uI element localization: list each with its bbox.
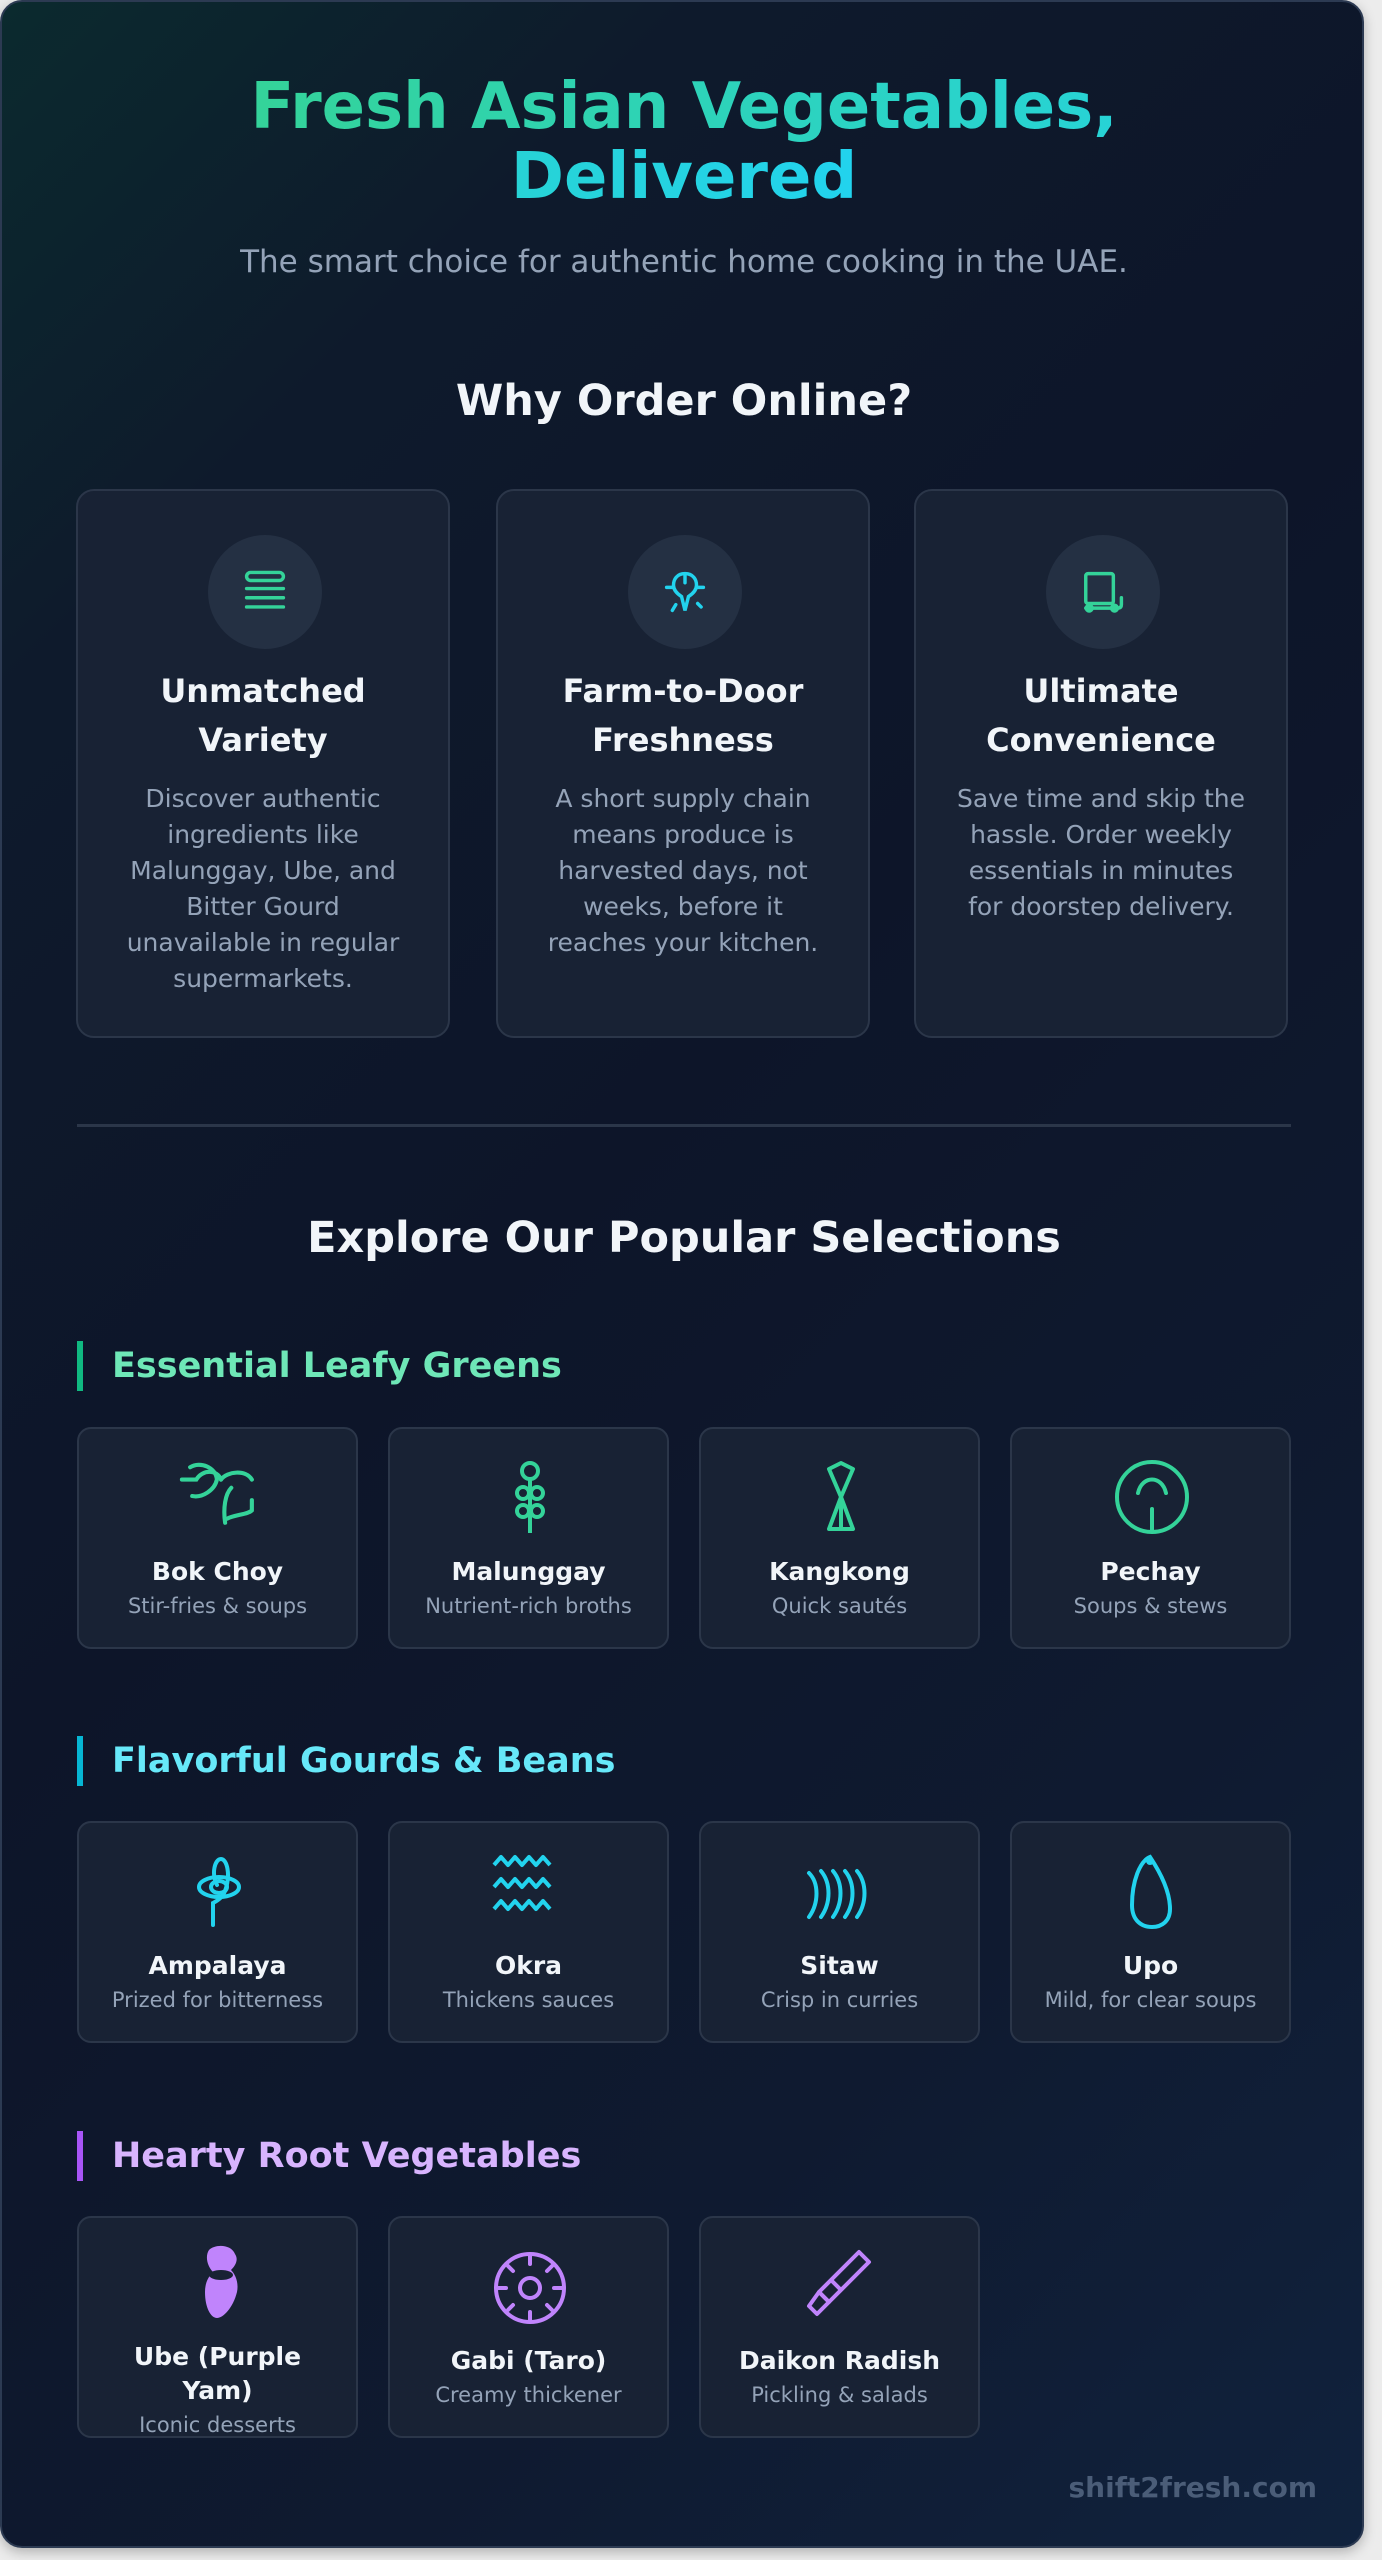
card: kangkong (699, 1427, 980, 1649)
panel: unmatched variety: Bitter Gourd (186, 892, 340, 921)
card: malunggay (388, 1427, 669, 1649)
card: upo: Mild, for clear soups (1045, 1988, 1256, 2012)
main card: Essential Leafy Greens (112, 1346, 562, 1386)
panel: farm-to-door: means produce is (572, 820, 794, 849)
panel: unmatched variety: Variety (198, 721, 328, 759)
card: malunggay: Malunggay (451, 1557, 606, 1586)
card: daikon: Pickling & salads (751, 2383, 928, 2407)
card: gabi (388, 2216, 669, 2438)
card: sitaw: Crisp in curries (761, 1988, 918, 2012)
title: Fresh Asian Vegetables, (250, 70, 1118, 144)
panel: convenience: hassle. Order weekly (970, 820, 1232, 849)
card: bok choy: Bok Choy (152, 1557, 283, 1586)
card: daikon: Daikon Radish (739, 2346, 940, 2375)
panel: unmatched variety: ingredients like (167, 820, 359, 849)
icon: sprout (628, 535, 742, 649)
panel: convenience: for doorstep delivery. (968, 892, 1234, 921)
card: pechay: Pechay (1100, 1557, 1201, 1586)
title: Delivered (511, 140, 857, 214)
card: pechay (1010, 1427, 1291, 1649)
card: ube: Iconic desserts (139, 2413, 296, 2437)
panel: farm-to-door: A short supply chain (555, 784, 811, 813)
panel: unmatched variety: Unmatched (160, 672, 366, 710)
main card: Hearty Root Vegetables (112, 2136, 581, 2176)
panel: unmatched variety: supermarkets. (173, 964, 353, 993)
card: bok choy: Stir-fries & soups (128, 1594, 307, 1618)
footer: brand: shift2fresh.com (1069, 2471, 1317, 2504)
category heading: roots (77, 2131, 581, 2181)
panel: farm-to-door: reaches your kitchen. (548, 928, 818, 957)
card: sitaw (699, 1821, 980, 2043)
heading: explore: Explore Our Popular Selections (307, 1213, 1061, 1263)
card: kangkong: Quick sautés (772, 1594, 907, 1618)
panel: farm-to-door: Freshness (592, 721, 774, 759)
panel: convenience: essentials in minutes (969, 856, 1233, 885)
panel: unmatched variety: Discover authentic (145, 784, 381, 813)
main card: Flavorful Gourds & Beans (112, 1741, 615, 1781)
category heading: leafy greens (77, 1341, 562, 1391)
card: ampalaya: Prized for bitterness (112, 1988, 323, 2012)
panel: convenience (914, 489, 1288, 1038)
card: pechay: Soups & stews (1074, 1594, 1227, 1618)
card: sitaw: Sitaw (800, 1951, 879, 1980)
card: okra: Thickens sauces (443, 1988, 614, 2012)
icon: list (208, 535, 322, 649)
card: gabi: Creamy thickener (435, 2383, 622, 2407)
card: bok choy (77, 1427, 358, 1649)
heading: why order online: Why Order Online? (456, 376, 912, 426)
panel: unmatched variety (76, 489, 450, 1038)
panel: convenience: Ultimate (1023, 672, 1179, 710)
card: okra (388, 1821, 669, 2043)
title (250, 70, 1118, 214)
card: upo: Upo (1123, 1951, 1178, 1980)
panel: farm-to-door (496, 489, 870, 1038)
panel: farm-to-door: harvested days, not (558, 856, 808, 885)
card: ube (77, 2216, 358, 2438)
panel: farm-to-door: Farm-to-Door (563, 672, 803, 710)
card: malunggay: Nutrient-rich broths (425, 1594, 632, 1618)
panel: convenience: Convenience (986, 721, 1216, 759)
subtitle: The smart choice for authentic home cooking in the UAE. (240, 244, 1128, 280)
card: kangkong: Kangkong (769, 1557, 910, 1586)
card: upo (1010, 1821, 1291, 2043)
panel: farm-to-door: weeks, before it (583, 892, 783, 921)
panel: convenience: Save time and skip the (957, 784, 1245, 813)
panel: unmatched variety: unavailable in regular (127, 928, 399, 957)
panel: unmatched variety: Malunggay, Ube, and (130, 856, 396, 885)
card: gabi: Gabi (Taro) (451, 2346, 606, 2375)
card: okra: Okra (495, 1951, 562, 1980)
card: ampalaya: Ampalaya (148, 1951, 286, 1980)
card: daikon (699, 2216, 980, 2438)
icon: cart (1046, 535, 1160, 649)
card: ampalaya (77, 1821, 358, 2043)
card: ube: Yam) (182, 2376, 253, 2405)
card: ube: Ube (Purple (134, 2342, 301, 2371)
category heading: gourds (77, 1736, 615, 1786)
